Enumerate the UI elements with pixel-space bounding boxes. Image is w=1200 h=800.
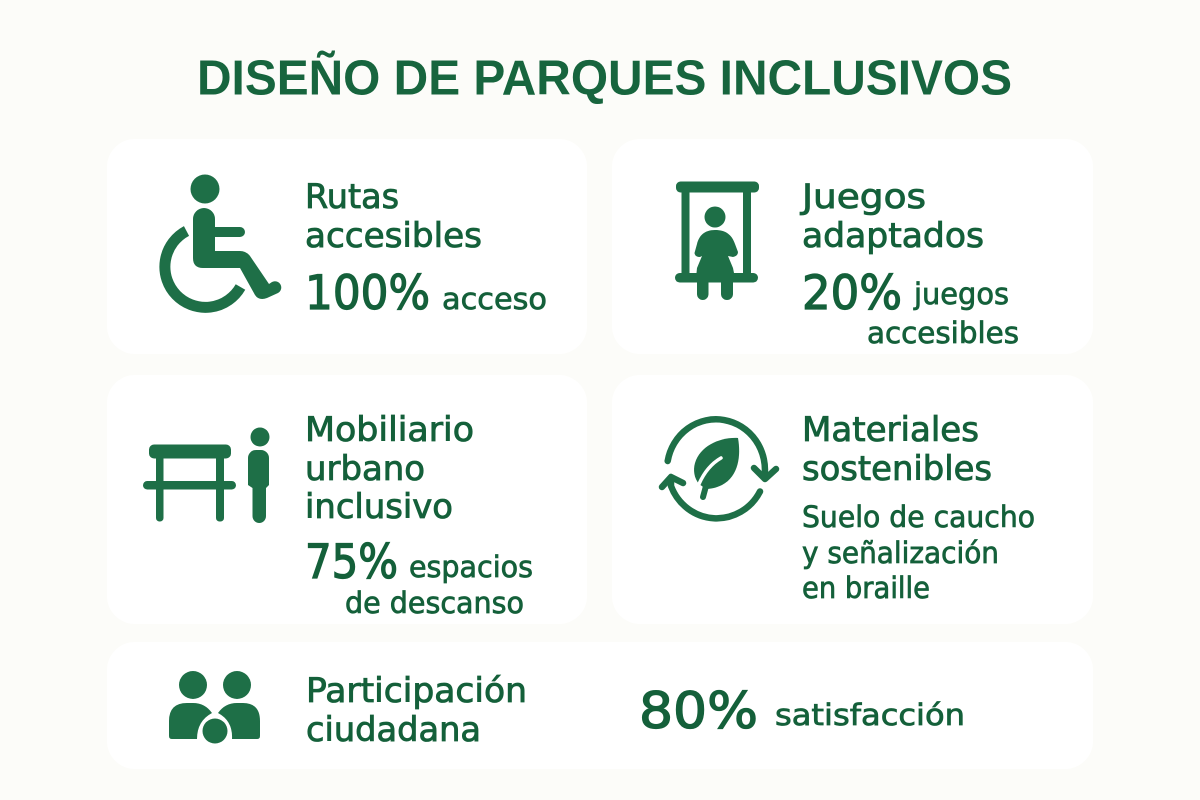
heading: juegos adaptados: adaptados [802,216,984,255]
icon: people [169,671,260,744]
heading: materiales sostenibles: Materiales [802,410,979,449]
panel: juegos adaptados [612,139,1093,354]
heading: participación ciudadana [306,671,527,749]
heading: rutas accesibles [305,177,482,255]
stat: 80% satisfacción: satisfacción [775,698,965,732]
icon: recycling leaf [662,419,776,518]
stat: 20% juegos accesibles: accesibles [867,316,1019,350]
icon: bench and person [143,428,270,523]
icon: swing [675,182,759,300]
heading: mobiliario urbano inclusivo: urbano [305,449,425,488]
stat: 100% acceso: acceso [442,282,547,316]
stat: 75% espacios de descanso [305,535,533,620]
heading: mobiliario urbano inclusivo: Mobiliario [305,410,474,449]
panel: rutas accesibles [107,139,587,354]
stat: 20% juegos accesibles: juegos [913,277,1009,311]
heading: rutas accesibles: accesibles [305,216,482,255]
panel: materiales sostenibles [612,375,1093,624]
heading: mobiliario urbano inclusivo: inclusivo [305,487,453,526]
heading: juegos adaptados [800,177,984,255]
text: suelo de caucho y señalización en braille [802,500,1035,605]
heading: materiales sostenibles [802,410,992,488]
stat: 75% espacios de descanso: de descanso [345,586,524,620]
title: DISEÑO DE PARQUES INCLUSIVOS [197,52,1012,106]
stat: 20% juegos accesibles: 20% [802,266,902,321]
stat: 75% espacios de descanso: 75% [305,535,398,590]
stat: 20% juegos accesibles [802,266,1019,350]
heading: participación ciudadana: ciudadana [306,710,481,749]
heading: juegos adaptados: Juegos [800,177,926,216]
stat: 75% espacios de descanso: espacios [409,550,533,584]
panel: participación ciudadana [107,642,1093,769]
text: suelo de caucho y señalización en braille: y señalización [802,536,999,570]
stat: 80% satisfacción: 80% [639,682,758,740]
stat: 100% acceso: 100% [305,266,430,321]
heading: mobiliario urbano inclusivo [305,410,474,526]
heading: rutas accesibles: Rutas [305,177,399,216]
text: suelo de caucho y señalización en braille: en braille [802,571,930,605]
text: suelo de caucho y señalización en braille: Suelo de caucho [802,500,1035,534]
panel: mobiliario urbano inclusivo [107,375,587,624]
heading: materiales sostenibles: sostenibles [802,449,992,488]
stat: 80% satisfacción [639,682,965,740]
heading: participación ciudadana: Participación [306,671,527,710]
icon: wheelchair [165,174,281,307]
stat: 100% acceso [305,266,547,321]
